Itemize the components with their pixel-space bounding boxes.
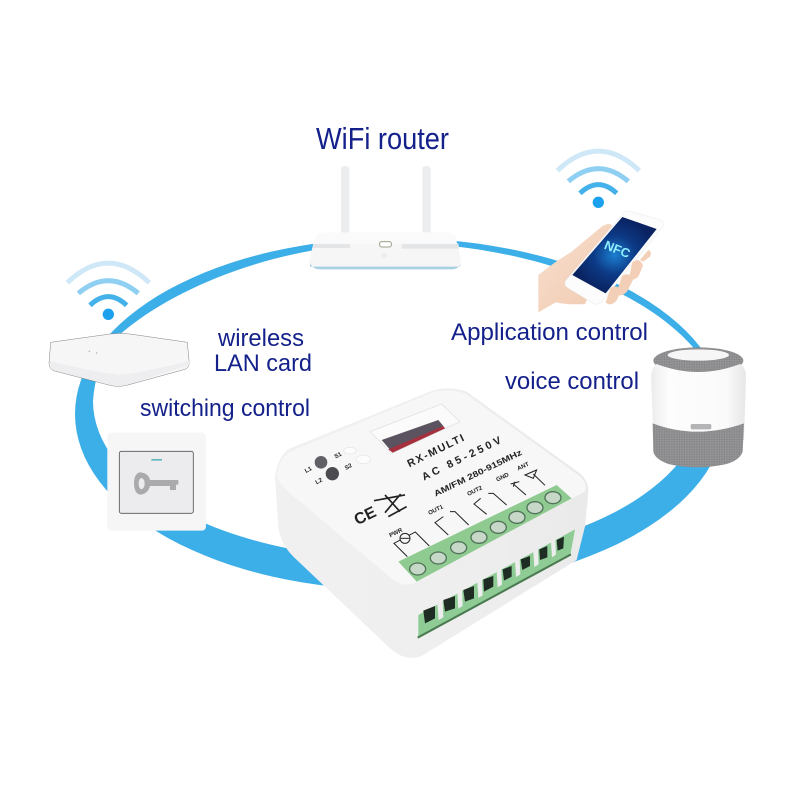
terminal labels: ANT xyxy=(517,462,531,472)
indicator lights and buttons xyxy=(304,447,370,486)
terminal labels xyxy=(389,462,531,539)
model labels: AM/FM 280-915MHz xyxy=(432,447,523,498)
icon: hand holding phone with NFC xyxy=(538,211,664,312)
indicator lights and buttons: S1 xyxy=(334,451,344,460)
icon: WiFi signal above LAN card xyxy=(67,263,149,320)
terminal labels: OUT1 xyxy=(428,504,445,517)
display window xyxy=(370,404,460,453)
NFC screen label: NFC xyxy=(602,238,632,261)
label: voice control: voice control xyxy=(505,368,639,395)
panel: RX-MULTI receiver module xyxy=(275,388,588,658)
model labels: AC 85-250V xyxy=(420,434,504,483)
icon: WiFi signal above phone xyxy=(557,151,639,208)
icon: WiFi router device xyxy=(309,166,461,269)
green screw strip xyxy=(398,485,572,582)
blue connection ring xyxy=(75,238,725,590)
model labels: RX-MULTI xyxy=(405,432,466,470)
terminal labels: PWR xyxy=(389,527,404,539)
module body xyxy=(275,388,588,658)
icon: wall switch with key xyxy=(107,433,206,531)
indicator lights and buttons: L1 xyxy=(304,466,314,475)
module top face xyxy=(277,390,586,585)
indicator lights and buttons: S2 xyxy=(344,463,354,472)
label: wireless LAN card xyxy=(214,325,312,377)
icon: smart speaker xyxy=(651,347,746,467)
indicator lights and buttons: L2 xyxy=(315,477,324,486)
wiring diagram xyxy=(394,470,545,557)
terminal labels: OUT2 xyxy=(467,485,484,498)
green terminal slots xyxy=(417,529,575,639)
icon: wireless LAN card device xyxy=(49,333,189,386)
label: Application control: Application control xyxy=(451,319,648,346)
model labels xyxy=(405,432,523,498)
CE and WEEE marks xyxy=(352,494,407,529)
label: switching control: switching control xyxy=(140,395,310,422)
CE and WEEE marks: CE xyxy=(352,504,379,529)
heading: WiFi router: WiFi router xyxy=(316,121,449,156)
terminal labels: GND xyxy=(496,472,511,483)
label: wireless LAN card: LAN card xyxy=(214,350,312,377)
label: wireless LAN card: wireless xyxy=(217,325,304,352)
